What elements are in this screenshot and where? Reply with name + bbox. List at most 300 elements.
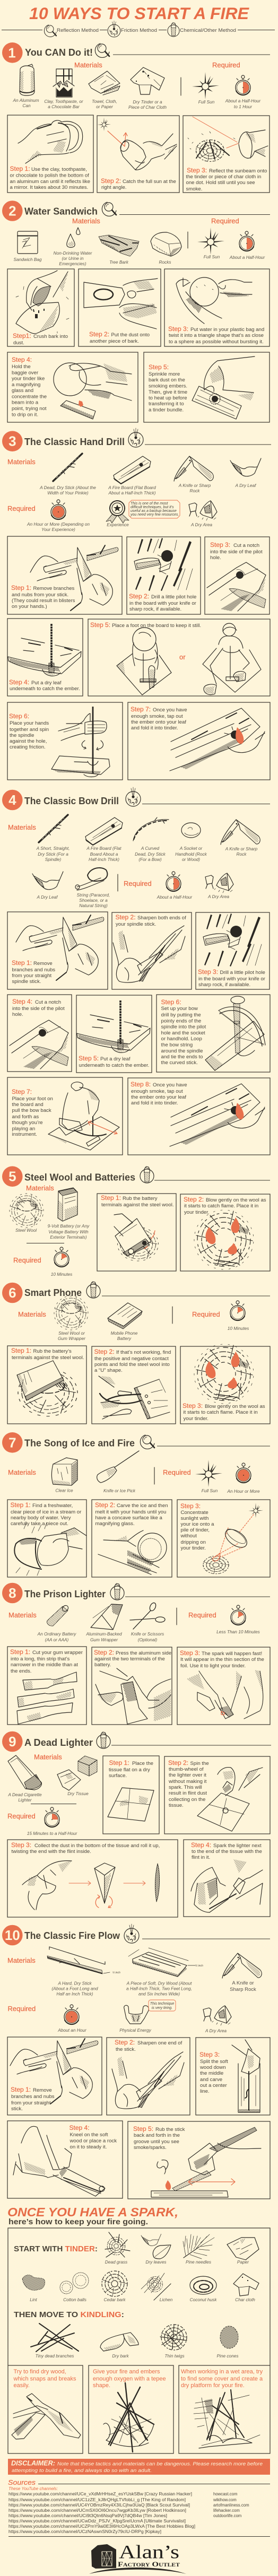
icon: chemical bbox=[110, 1583, 124, 1600]
step 7 text: playing an bbox=[12, 1126, 35, 1132]
step 8 text: and fold it into tinder. bbox=[131, 1100, 178, 1106]
illustration: tepee on dry platform bbox=[194, 2390, 260, 2448]
step 3 text: smoke. bbox=[186, 186, 202, 192]
material: fire board bbox=[85, 817, 123, 862]
required: full sun: Full Sun bbox=[204, 254, 220, 259]
step 8 text: Once you have bbox=[153, 1082, 187, 1088]
material: curved stick: Dead, Dry Stick bbox=[135, 851, 166, 857]
material: mobile phone battery bbox=[108, 1303, 142, 1341]
panel: step 6 spin the spindle bbox=[7, 702, 123, 780]
tinder: cedar bark: Cedar bark bbox=[103, 2297, 126, 2302]
heading 8: The Prison Lighter bbox=[24, 1588, 106, 1599]
required: an hour or more stopwatch bbox=[27, 500, 90, 532]
step 3 text: Blow gently on the wool as bbox=[205, 1404, 265, 1409]
step 4 text: your tinder like bbox=[12, 376, 45, 382]
step 3 text: Split the soft bbox=[200, 2059, 228, 2065]
step 2 text: against the two terminals of the bbox=[94, 1656, 165, 1662]
materials heading: Materials bbox=[7, 458, 36, 466]
required: half hour stopwatch: About a Half-Hour bbox=[157, 894, 193, 900]
step 3 text: wood down bbox=[199, 2065, 226, 2070]
step 7 text: Step 7: bbox=[131, 706, 151, 713]
step 1 text: branches and nubs bbox=[11, 2094, 55, 2100]
step 5 text: Sprinkle more bbox=[149, 371, 180, 377]
step 2 text: your tinder. bbox=[184, 1209, 209, 1215]
step 5 text: groove until you see bbox=[134, 2139, 179, 2145]
material: string: Shoelace, or a bbox=[79, 898, 108, 903]
required: experience ribbon: Experience bbox=[107, 522, 129, 527]
required: dry area tent: A Dry Area bbox=[205, 2028, 227, 2033]
illustration: spindle and board with leaf bbox=[8, 624, 81, 676]
step 4 text: on it to steady it. bbox=[70, 2144, 107, 2150]
step 1 text: into a long, thin strip that’s bbox=[11, 1656, 70, 1662]
required: 10 minute stopwatch: 10 Minutes bbox=[51, 1272, 72, 1277]
section 5: Steel Wool and Batteries bbox=[2, 1166, 270, 1278]
step 4 text: hole. bbox=[12, 1012, 23, 1017]
website source list: wikihow.com bbox=[213, 2497, 237, 2502]
panel: step 2 fold into U bbox=[92, 1346, 176, 1424]
tinder: dry leaves: Dry leaves bbox=[145, 2259, 167, 2265]
icon: friction bbox=[126, 787, 141, 806]
material: piece of soft dry wood bbox=[126, 1948, 203, 1997]
step 6 text: Step 6: bbox=[9, 712, 29, 720]
step 1 text: spindle stick. bbox=[12, 979, 41, 985]
section 2: Water Sandwich bbox=[2, 201, 270, 422]
step 5 text: smoking embers. bbox=[149, 383, 187, 389]
illustration: flat tissue bbox=[108, 1788, 154, 1821]
material: socket or handhold: or Wood) bbox=[182, 857, 200, 862]
material: string: String (Paracord, bbox=[77, 892, 110, 898]
step 5 text: to heat up before bbox=[149, 395, 187, 401]
panel: step 1 rub terminals bbox=[97, 1194, 176, 1271]
material: knife: Rock bbox=[237, 851, 247, 857]
step 4 text: Step 4: bbox=[12, 356, 32, 363]
step 7 text: the ember onto your leaf bbox=[131, 719, 186, 725]
required: physical energy: Physical Energy bbox=[119, 2027, 152, 2033]
material: hard dry stick: Half an Inch Thick) bbox=[56, 1991, 93, 1997]
panel: step 7 bow back and forth bbox=[7, 1077, 123, 1155]
step 3 text: Drill a little pilot hole bbox=[220, 970, 265, 976]
heading 10: The Classic Fire Plow bbox=[24, 1930, 120, 1941]
tinder: paper bbox=[227, 2238, 259, 2265]
step 6 text: or handhold. Loop bbox=[161, 1036, 202, 1042]
step 4 text: concentrate the bbox=[12, 394, 47, 400]
material: knife or ice pick: Knife or Ice Pick bbox=[103, 1488, 136, 1493]
section 6: Smart Phone bbox=[2, 1282, 270, 1424]
step 5 text: Step 5: bbox=[133, 2125, 153, 2133]
icon: chemical bbox=[140, 1167, 154, 1183]
number badge 5 bbox=[2, 1166, 23, 1187]
tip text: to find some cover and create a bbox=[181, 2375, 263, 2382]
material: hard dry stick bbox=[47, 1947, 120, 1997]
website source list bbox=[213, 2492, 249, 2518]
step 3 text: Step 3: bbox=[198, 968, 218, 976]
kindling: tiny dead branches bbox=[31, 2323, 79, 2359]
website source list: howcast.com bbox=[213, 2492, 238, 2496]
step 3 text: Step 3: bbox=[210, 541, 230, 549]
callout: difficulty note: you need very few resources. bbox=[130, 513, 179, 517]
callout: difficulty note: This is one of the most bbox=[131, 502, 168, 506]
illustration: sharpening spindle bbox=[113, 926, 185, 982]
callout: difficulty note: difficult techniques, but it’s bbox=[131, 506, 174, 509]
step 3 text: your tinder. bbox=[180, 1545, 206, 1551]
material: aluminum can: An Aluminum bbox=[12, 98, 39, 103]
material: ordinary battery bbox=[37, 1604, 76, 1642]
required: full sun: Full Sun bbox=[202, 1488, 218, 1493]
panel: step 1 polish the can bbox=[7, 115, 93, 193]
required: full sun bbox=[197, 228, 224, 259]
required: half hour to one hour stopwatch: to 1 Hour bbox=[234, 104, 253, 109]
material: aluminum can bbox=[12, 64, 39, 108]
youtube source list: https://www.youtube.com/channel/UC1zZE_kJ8rQHgLTVfobLi_g [The King of Random] bbox=[8, 2497, 186, 2502]
step 5 text: Step 5: bbox=[79, 1055, 99, 1062]
step 1 text: Step 1: bbox=[10, 1648, 30, 1656]
panel: step 1 find ice bbox=[7, 1500, 86, 1577]
step 4 text: underneath to catch the ember. bbox=[10, 686, 80, 692]
panel: step 6 set up bow drill bbox=[157, 995, 270, 1072]
step 4 text: Cut a notch bbox=[35, 999, 61, 1005]
panel: step 1 remove branches bbox=[7, 536, 122, 614]
step 3 text: Step 3: bbox=[11, 1841, 31, 1849]
icon: chemical method bbox=[168, 23, 179, 37]
heading 5: Steel Wool and Batteries bbox=[24, 1171, 135, 1183]
step 6 text: pointy ends of the bbox=[161, 1019, 201, 1024]
material: water drops: (or Urine in bbox=[62, 256, 84, 261]
panel: step 3 cut a notch bbox=[205, 537, 270, 614]
kindling: thin twigs bbox=[160, 2324, 187, 2359]
step 1 text: or chocolate to polish the bottom of bbox=[10, 173, 89, 178]
tinder heading: START WITH TINDER: bbox=[14, 2245, 98, 2253]
number badge 8 bbox=[2, 1583, 23, 1603]
material: dead dry stick: A Dead, Dry Stick (About the bbox=[39, 485, 96, 490]
step 4 text: glass and bbox=[12, 388, 33, 394]
step 3 text: dripping on bbox=[180, 1539, 206, 1545]
panel: step 4 concentrate beam bbox=[7, 352, 138, 422]
tip text: Try to find dry wood, bbox=[14, 2369, 66, 2375]
step 6 text: the curved stick. bbox=[161, 1060, 198, 1066]
step 1 text: Crush bark into bbox=[33, 334, 68, 340]
material: short straight stick: A Short, Straight, bbox=[36, 846, 70, 851]
step 4 text: to drip on it. bbox=[12, 412, 38, 418]
logo wordmark: Alan’s bbox=[119, 2542, 179, 2563]
callout: tiring note: is very tiring. bbox=[152, 2006, 172, 2010]
callout: difficulty note bbox=[129, 500, 180, 518]
materials heading: Materials bbox=[34, 1753, 62, 1761]
required heading: Required bbox=[7, 504, 36, 512]
step 1 text: Step 1: bbox=[101, 1194, 121, 1202]
icon: magnifier bbox=[102, 202, 116, 216]
step 1 text: Rub the battery’s bbox=[33, 1348, 72, 1354]
step 6 text: the spindle bbox=[10, 733, 34, 738]
required: 15 to 30 minute stopwatch bbox=[27, 1807, 77, 1836]
step 2 text: the lighter over it bbox=[169, 1772, 206, 1778]
required heading: Required bbox=[211, 217, 239, 225]
step 3 text: sunlight with bbox=[180, 1516, 209, 1521]
step 3 text: sharp rock, if available. bbox=[198, 982, 250, 988]
tinder: pine needles: Pine needles bbox=[186, 2259, 211, 2265]
required: half hour stopwatch bbox=[229, 231, 265, 260]
illustration: ice lens focusing sun on tinder bbox=[203, 1503, 263, 1574]
material: fire board: A Fire Board (Flat Board bbox=[108, 485, 156, 490]
step 4 text: flint in it. bbox=[192, 1855, 210, 1860]
required heading: Required bbox=[7, 1812, 36, 1820]
step 6 text: and tie the ends to bbox=[161, 1054, 203, 1060]
step 4 text: Spark the lighter next bbox=[213, 1843, 262, 1849]
material: dead dry stick bbox=[39, 454, 96, 495]
panel: step 2 carve ice bbox=[92, 1500, 172, 1577]
step 2 text: Step 2: bbox=[101, 177, 121, 185]
illustration: fire plow bbox=[151, 2127, 261, 2197]
step 4 text: Step 4: bbox=[69, 2124, 90, 2131]
step 3 text: Step 3: bbox=[168, 325, 188, 333]
step 5 text: bark dust on the bbox=[149, 377, 185, 383]
step 1 text: Step 1: bbox=[11, 1501, 31, 1509]
material: dry tinder or char cloth: Dry Tinder or a bbox=[133, 99, 162, 105]
number badge 3: 3 bbox=[8, 433, 16, 449]
number badge 10: 10 bbox=[5, 1927, 20, 1943]
illustration: sharpening stick bbox=[112, 2052, 184, 2109]
material: gum wrapper bbox=[85, 1604, 123, 1642]
required: full sun: Full Sun bbox=[198, 99, 215, 105]
step 5 text: smoke/sparks. bbox=[134, 2145, 167, 2151]
illustration: snapped branch bbox=[12, 2394, 81, 2439]
number badge 7 bbox=[2, 1432, 23, 1453]
step 1 text: tissue flat on a dry bbox=[109, 1767, 150, 1773]
step 3 text: Step 3: bbox=[180, 1649, 200, 1657]
panel: step 2 put dust on bark bbox=[79, 269, 161, 346]
material: knife: A Knife or Sharp bbox=[178, 483, 211, 488]
step 2 text: Step 2: bbox=[94, 1348, 115, 1355]
illustration: spindle and board with leaf bbox=[77, 1000, 150, 1052]
material: water drops: Non-Drinking Water bbox=[54, 250, 93, 256]
step 1 text: terminals against the steel wool. bbox=[12, 1355, 84, 1361]
material: 9-volt battery: 9-Volt Battery (or Any bbox=[48, 1223, 90, 1229]
panel: step 2 spin thumb wheel bbox=[164, 1756, 270, 1834]
section: once you have a spark bbox=[7, 2205, 270, 2453]
panel: step 5 rub stick in groove bbox=[128, 2121, 270, 2199]
required: half hour to one hour stopwatch bbox=[225, 75, 261, 109]
illustration: phone battery on wool bbox=[11, 1361, 84, 1422]
material: gum wrapper: Aluminum-Backed bbox=[85, 1631, 122, 1637]
step 4 text: Step 4: bbox=[12, 998, 32, 1005]
material: knife or ice pick bbox=[97, 1451, 139, 1493]
step 4 text: point, trying not bbox=[12, 406, 47, 412]
step 2 text: melt it with your hands until you bbox=[95, 1509, 166, 1515]
material: string: Natural String) bbox=[79, 903, 108, 908]
material: steel wool or gum wrapper: Gum Wrapper bbox=[58, 1336, 86, 1341]
material: clear ice bbox=[51, 1458, 77, 1493]
step 1 text: on your hands.) bbox=[12, 604, 47, 610]
step 1 text: carefully take a piece out. bbox=[11, 1521, 68, 1527]
panel: step 1 remove branches bbox=[7, 2037, 102, 2115]
illustration: wrapper on battery bbox=[95, 1668, 171, 1724]
required: about an hour stopwatch bbox=[57, 2005, 87, 2033]
step 2 text: another piece of bark. bbox=[90, 338, 139, 344]
section 3: The Classic Hand Drill bbox=[2, 428, 271, 780]
material: clear ice: Clear Ice bbox=[55, 1488, 73, 1493]
logo tagline: Factory Outlet bbox=[118, 2561, 180, 2568]
step 3 text: one dot. Hold still until you see bbox=[186, 180, 255, 186]
step 7 text: the board and bbox=[12, 1102, 44, 1108]
materials heading: Materials bbox=[18, 1310, 46, 1318]
step 8 text: enough smoke, tap out bbox=[131, 1089, 183, 1094]
number badge 10 bbox=[2, 1925, 23, 1945]
step 3 text: Step 3: bbox=[183, 1402, 203, 1409]
material: chocolate bar: Clay, Toothpaste, or bbox=[44, 99, 84, 104]
material: ordinary battery: (AA or AAA) bbox=[45, 1637, 69, 1642]
required heading: Required bbox=[7, 2005, 36, 2013]
sources heading: Sources bbox=[8, 2478, 36, 2486]
heading 4: The Classic Bow Drill bbox=[24, 795, 119, 806]
title: 10 WAYS TO START A FIRE bbox=[29, 4, 249, 23]
illustration: board with ember bbox=[170, 1084, 265, 1146]
number badge 1 bbox=[2, 42, 23, 63]
material: dead dry stick: Width of Your Pinkie) bbox=[47, 490, 89, 495]
step 5 text: Place a foot on the board to keep it still. bbox=[112, 623, 201, 629]
materials heading: Materials bbox=[8, 1468, 36, 1476]
material: dry leaf: A Dry Leaf bbox=[37, 894, 58, 900]
step 2 text: Step 2: bbox=[184, 1196, 204, 1203]
illustration: person kneeling on board bbox=[203, 623, 261, 695]
heading 9: A Dead Lighter bbox=[24, 1737, 93, 1748]
required: an hour or more stopwatch: Your Experience) bbox=[41, 527, 75, 532]
step 2 text: tissue. bbox=[169, 1803, 184, 1808]
tinder: lint: Lint bbox=[30, 2297, 37, 2302]
youtube source list: https://www.youtube.com/channel/UCmSX0OI6Oncu7wgpKb3ILyw [Robert Hodkinson] bbox=[8, 2508, 186, 2513]
step 3 text: in the board with your knife or bbox=[198, 976, 266, 982]
tip text: shape. bbox=[93, 2382, 110, 2389]
step 3 text: Step 3: bbox=[180, 1502, 201, 1510]
illustration: sprinkling dust on ember bbox=[192, 356, 255, 419]
panel: step 4 kneel on wood bbox=[7, 2121, 123, 2198]
material: tree bark bbox=[99, 235, 139, 265]
heading 3: The Classic Hand Drill bbox=[24, 436, 125, 447]
icon: magnifier bbox=[95, 43, 109, 57]
step 2 text: Blow gently on the wool as bbox=[206, 1197, 266, 1203]
panel: step 2 sharpen ends bbox=[112, 912, 192, 989]
required: half hour to one hour stopwatch: About a Half-Hour bbox=[225, 98, 261, 103]
website source list: artofmanliness.com bbox=[213, 2503, 249, 2508]
material: short straight stick bbox=[36, 815, 70, 862]
disclaimer banner: DISCLAIMER: bbox=[11, 2459, 55, 2467]
panel: step 2 drill pilot hole bbox=[127, 537, 201, 614]
illustration: whittling branch bbox=[30, 545, 118, 611]
illustration: board with ember bbox=[170, 708, 265, 771]
panel: step 3 drill pilot hole bbox=[196, 912, 270, 989]
panel: step 5 foot on board bbox=[88, 619, 270, 696]
material: 9-volt battery: Exterior Terminals) bbox=[50, 1234, 87, 1240]
step 7 text: instrument. bbox=[12, 1132, 37, 1137]
material: scissors: (Optional) bbox=[138, 1637, 157, 1642]
illustration: reflected beam on tinder bbox=[188, 117, 268, 162]
step 2 text: Step 2: bbox=[89, 330, 109, 338]
illustration: person standing on board bbox=[117, 628, 171, 695]
step 3 text: your tinder. bbox=[184, 1416, 209, 1422]
step 2 text: If that’s not working, find bbox=[116, 1350, 171, 1355]
sources bbox=[8, 2478, 270, 2537]
number badge 7: 7 bbox=[8, 1434, 16, 1450]
step 4 text: beam into a bbox=[12, 400, 39, 405]
step 6 text: Step 6: bbox=[161, 998, 181, 1006]
material: piece of soft dry wood: ½ inch bbox=[195, 1964, 203, 1968]
material: dry leaf: A Dry Leaf bbox=[235, 483, 257, 488]
panel: step 1 place tissue bbox=[103, 1756, 159, 1834]
number badge 3 bbox=[2, 431, 23, 451]
materials heading: Materials bbox=[8, 823, 36, 831]
illustration: wrapper strips bbox=[17, 1672, 77, 1724]
required: 10 minute stopwatch bbox=[51, 1247, 72, 1277]
step 6 text: drill by putting the bbox=[161, 1012, 201, 1018]
icon: friction bbox=[128, 428, 143, 447]
callout: difficulty note: useful as a backup because bbox=[131, 509, 177, 513]
step 5 text: Step 5: bbox=[90, 621, 110, 629]
material: steel wool or gum wrapper: Steel Wool or bbox=[58, 1330, 85, 1336]
legend label: chemical: Chemical/Other Method bbox=[180, 28, 236, 33]
material: dry tinder or char cloth bbox=[128, 67, 167, 110]
website source list: outdoorlife.com bbox=[213, 2513, 241, 2518]
step 1 text: from your straight bbox=[11, 2100, 51, 2106]
material: dead cigarette lighter: Lighter bbox=[18, 1797, 32, 1803]
step 7 text: Step 7: bbox=[12, 1088, 32, 1095]
step 3 text: into the side of the pilot bbox=[210, 549, 263, 555]
kindling: tiny dead branches: Tiny dead branches bbox=[36, 2353, 74, 2359]
material: dry tissue bbox=[57, 1756, 97, 1796]
material: dry tinder or char cloth: Piece of Char Cloth bbox=[128, 105, 167, 110]
required heading: Required bbox=[212, 61, 240, 69]
step 1 text: Place the bbox=[132, 1761, 153, 1766]
callout: tiring note bbox=[149, 2000, 176, 2011]
material: fire board: A Fire Board (Flat bbox=[86, 846, 121, 851]
material: curved stick: A Curved bbox=[141, 846, 160, 851]
materials heading: Materials bbox=[74, 61, 102, 69]
illustration: melting ice into a lens bbox=[98, 1530, 167, 1574]
illustration: tepee of sticks bbox=[103, 2383, 154, 2452]
step 4 text: into the side of the pilot bbox=[12, 1006, 65, 1012]
step 1 text: and nubs from your stick. bbox=[12, 592, 68, 598]
illustration: hands holding lighter bbox=[187, 1670, 263, 1719]
tinder: char cloth: Char cloth bbox=[235, 2297, 255, 2302]
heading 6: Smart Phone bbox=[24, 1287, 82, 1298]
step 1 text: Find a freshwater, bbox=[32, 1503, 73, 1509]
illustration: kneeling on wood bbox=[13, 2126, 105, 2196]
step 5 text: Put a dry leaf bbox=[100, 1056, 131, 1062]
step 2 text: points and fold the steel wool into bbox=[94, 1362, 170, 1368]
material: knife bbox=[174, 456, 213, 493]
material: water drops bbox=[54, 228, 93, 266]
material: curved stick bbox=[133, 817, 169, 862]
step 4 text: baggie over bbox=[12, 370, 39, 376]
step 2 text: thumb-wheel of bbox=[169, 1766, 204, 1772]
panel: tip tepee bbox=[89, 2365, 173, 2453]
material: socket or handhold bbox=[175, 823, 207, 862]
illustration: drilling pilot hole bbox=[134, 538, 193, 591]
step 1 text: surface. bbox=[109, 1773, 127, 1779]
step 2 text: Press the aluminum side bbox=[116, 1650, 171, 1656]
step 2 text: collecting on the bbox=[169, 1797, 205, 1803]
illustration: bow drill assembly bbox=[205, 996, 265, 1071]
material: steel wool bbox=[6, 1190, 47, 1233]
step 7 text: Once you have bbox=[153, 707, 187, 713]
step 1 text: Step 1: bbox=[10, 165, 30, 172]
step 6 text: around the spindle bbox=[161, 1048, 203, 1054]
step 3 text: the middle bbox=[200, 2070, 223, 2076]
step 5 text: Step 5: bbox=[149, 363, 169, 371]
tip text: which snaps and breaks bbox=[13, 2375, 76, 2382]
legend: method types bbox=[2, 21, 275, 37]
step 2 text: Carve the ice and then bbox=[117, 1503, 168, 1509]
material: hard dry stick: A Hard, Dry Stick bbox=[57, 1981, 92, 1986]
step 2 text: Sharpen one end of bbox=[137, 2040, 183, 2046]
material: fire board: About a Half-Inch Thick) bbox=[108, 490, 156, 495]
